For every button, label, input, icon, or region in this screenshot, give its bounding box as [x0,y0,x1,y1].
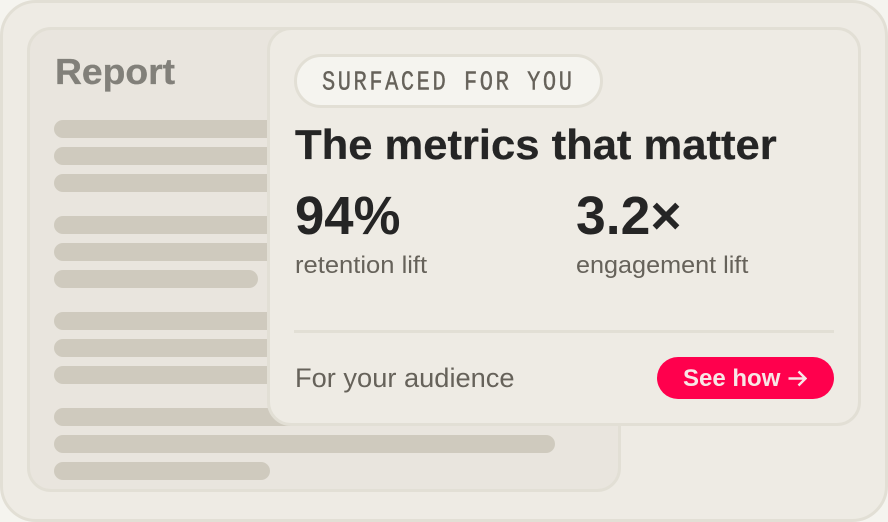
value 94%: 94% [295,186,400,246]
footer text: For your audience [295,363,515,393]
label retention lift: retention lift [295,252,427,279]
icon: arrow [788,370,807,386]
value 3.2x: 3.2× [576,186,682,246]
badge label: SURFACED FOR YOU [322,69,574,98]
heading: Report: Report [55,51,175,92]
button label: See how [683,365,780,392]
panel: metrics card [267,27,861,426]
metric: retention lift [295,186,427,279]
text placeholder bars [54,120,555,480]
label engagement lift: engagement lift [576,252,748,279]
title: The metrics that matter [295,121,777,168]
button: see how [657,357,834,399]
badge: surfaced for you [294,54,603,108]
metric: engagement lift [576,186,748,279]
